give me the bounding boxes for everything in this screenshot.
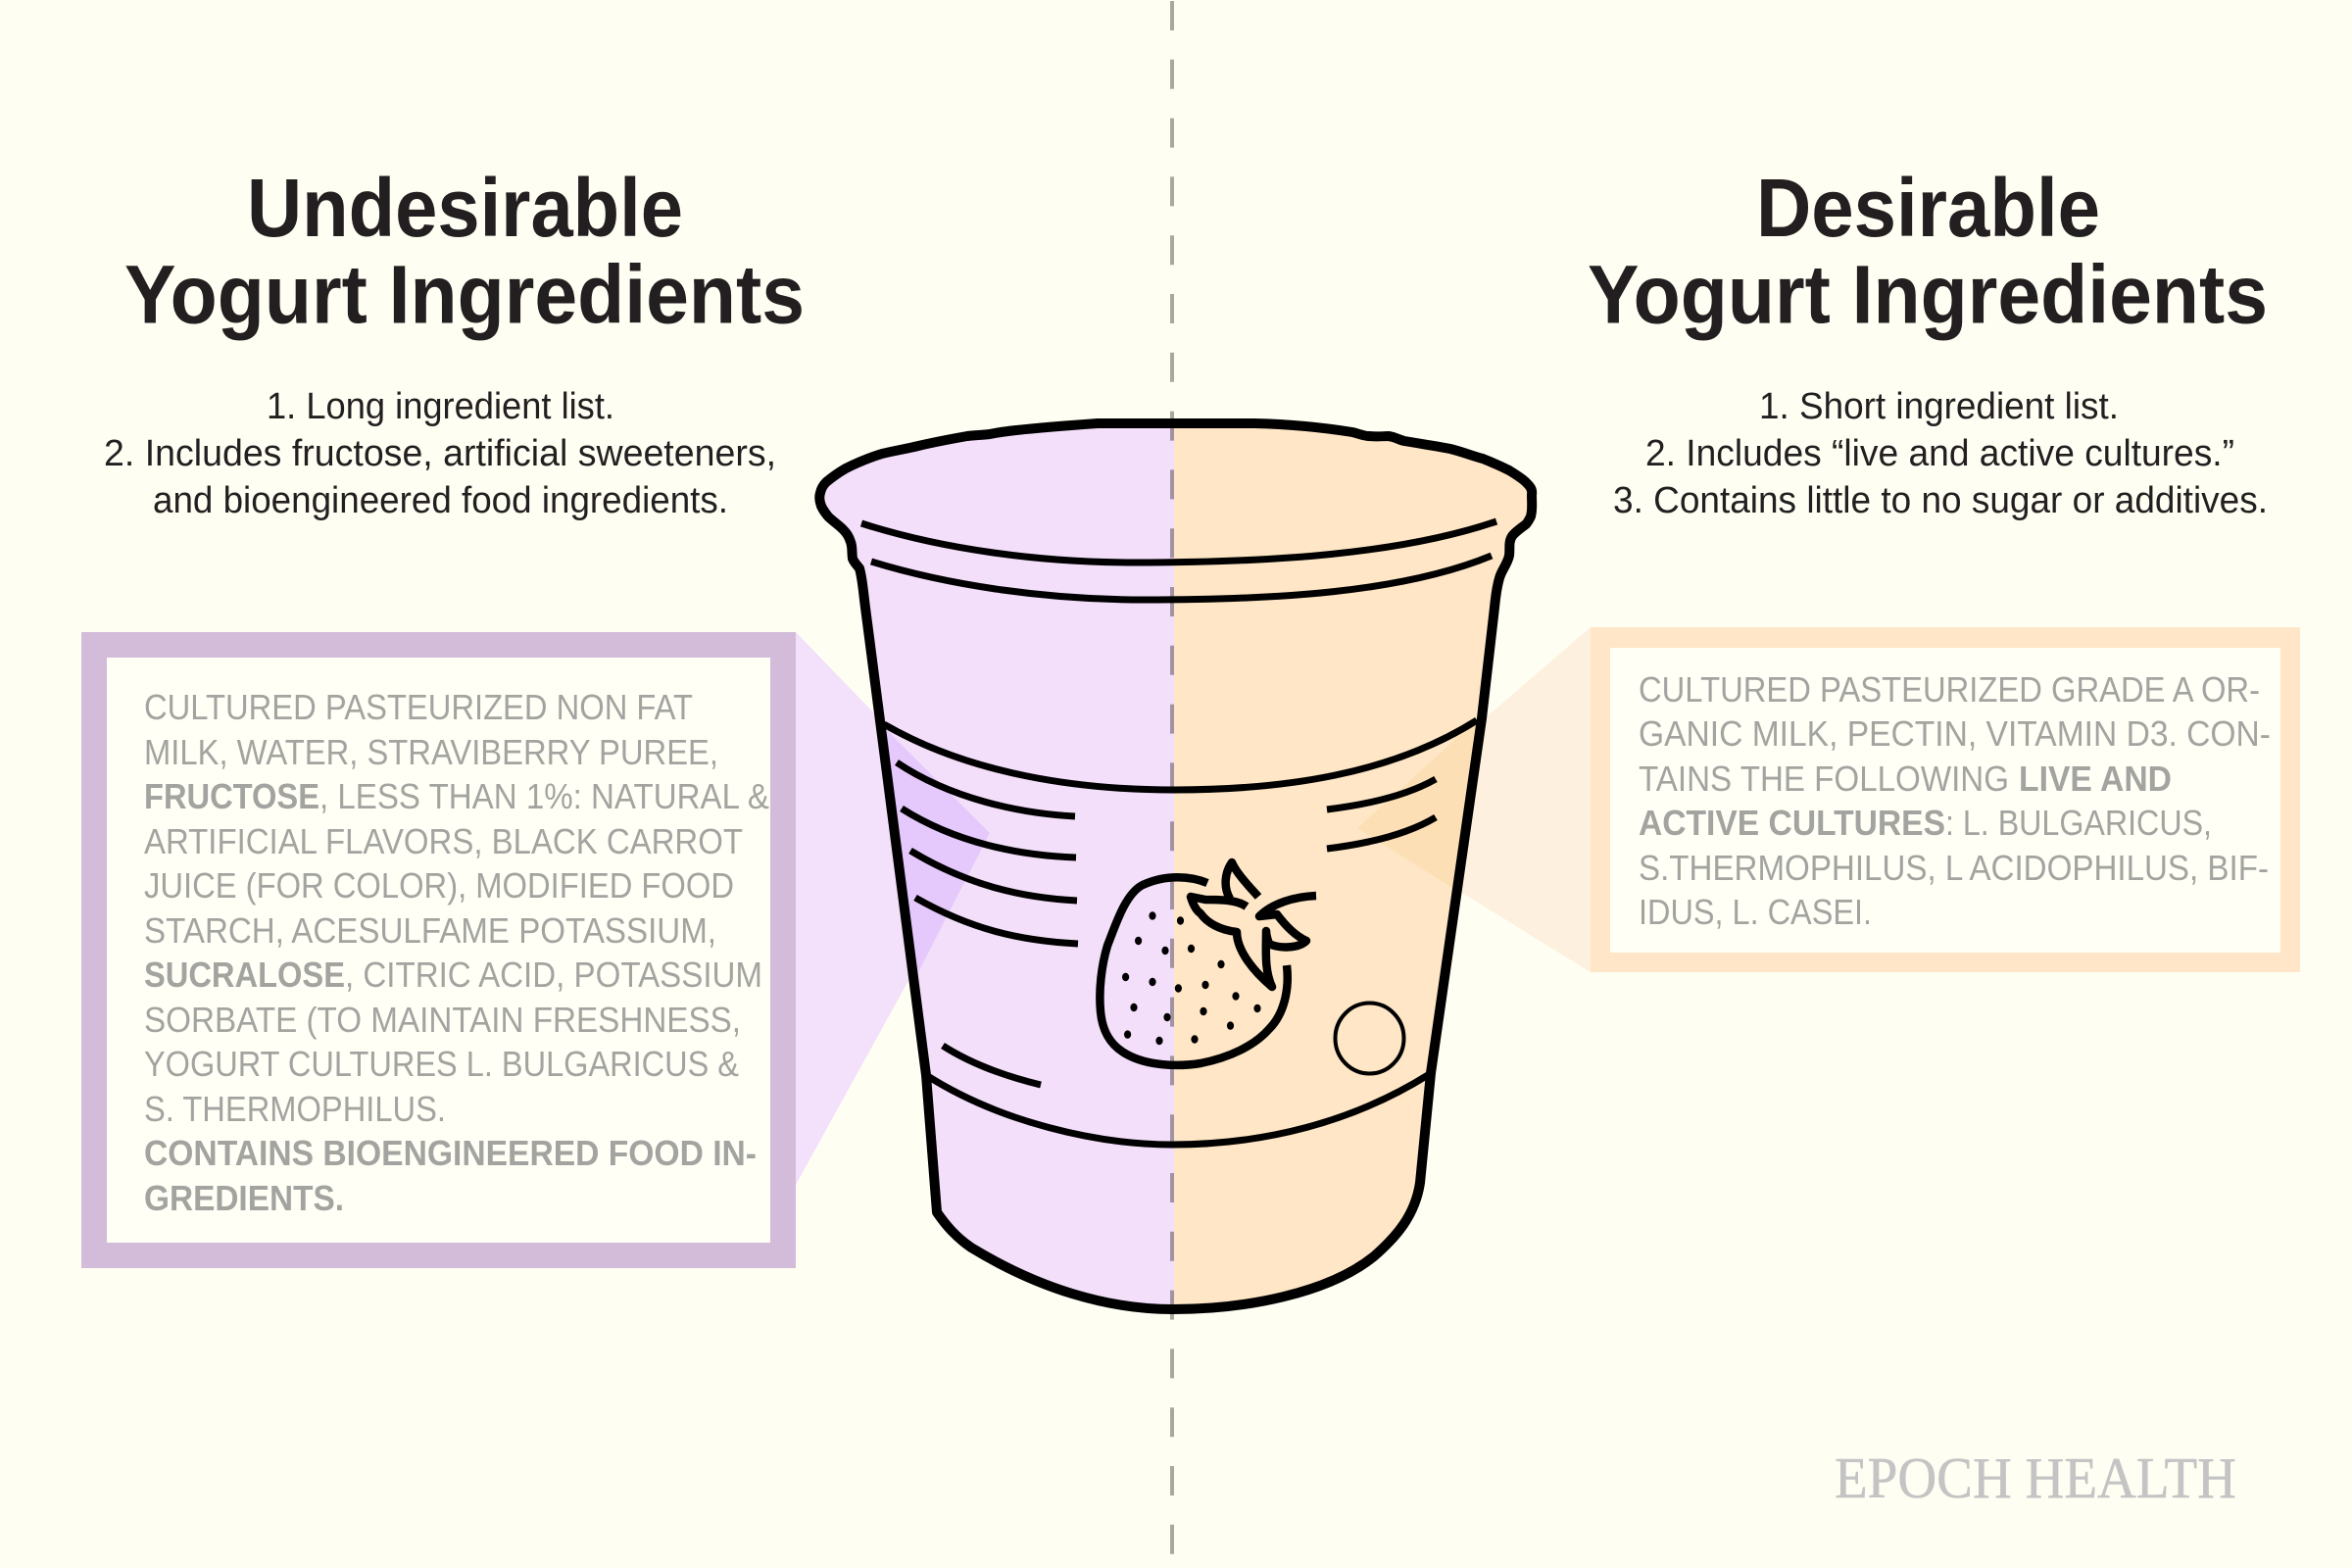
ingredient text: desirable: IDUS, L. CASEI. [1639,892,1872,932]
heading: undesirable: Undesirable [247,162,683,254]
heading: desirable [1588,162,2268,341]
ingredient text: undesirable: SORBATE (TO MAINTAIN FRESHNESS, [144,1000,741,1040]
ingredient text: desirable: GANIC MILK, PECTIN, VITAMIN D3. CON- [1639,713,2271,754]
logo: Epoch Health: EPOCH HEALTH [1835,1446,2236,1510]
rim lines [861,521,1496,600]
text block: desirable criteria [1613,386,2268,521]
label band [884,720,1477,1145]
ingredient text: undesirable: , CITRIC ACID, POTASSIUM [345,955,762,995]
text block: undesirable criteria: 2. Includes fructose, artificial sweeteners, [104,433,776,474]
ingredient text: undesirable: GREDIENTS. [144,1178,344,1218]
text block: undesirable criteria: and bioengineered food ingredients. [153,480,728,521]
cup outline [819,423,1532,1309]
strawberry seeds [1122,911,1261,1045]
ingredient text: undesirable: FRUCTOSE [144,776,319,816]
heading: undesirable [124,162,805,341]
cup fill: two-tone [804,412,1546,1323]
ingredient text: undesirable: SUCRALOSE [144,955,345,995]
icon: strawberry [1100,862,1316,1065]
icon: yogurt cup [804,412,1546,1323]
ingredient text: undesirable: STARCH, ACESULFAME POTASSIUM, [144,910,716,951]
heading: undesirable: Yogurt Ingredients [124,249,805,341]
text block: desirable criteria: 2. Includes “live and active cultures.” [1645,433,2234,474]
text block: desirable criteria: 1. Short ingredient list. [1759,386,2119,427]
heading: desirable: Desirable [1756,162,2100,254]
ingredient text: undesirable: JUICE (FOR COLOR), MODIFIED FOOD [144,865,734,906]
ingredient text: desirable: CULTURED PASTEURIZED GRADE A OR- [1639,669,2260,710]
ingredient text: undesirable: CONTAINS BIOENGINEERED FOOD IN- [144,1133,757,1173]
panel: undesirable ingredient label [81,632,796,1268]
ingredient text: desirable: LIVE AND [2019,759,2172,799]
ingredient text: desirable: TAINS THE FOLLOWING [1639,759,2009,799]
ingredient text: desirable: S.THERMOPHILUS, L ACIDOPHILUS, BIF- [1639,848,2269,888]
ingredient text: desirable: : L. BULGARICUS, [1945,803,2212,843]
ingredient text: undesirable: S. THERMOPHILUS. [144,1089,446,1129]
text block: desirable criteria: 3. Contains little to no sugar or additives. [1613,480,2268,521]
label text lines [897,762,1436,1085]
label circle [1335,1004,1403,1074]
ingredient text: undesirable: CULTURED PASTEURIZED NON FAT [144,687,693,727]
callout wedge: desirable [1357,627,1591,972]
ingredient text: undesirable [144,687,769,1218]
ingredient text: desirable: ACTIVE CULTURES [1639,803,1945,843]
text block: undesirable criteria [104,386,776,521]
text block: undesirable criteria: 1. Long ingredient list. [267,386,614,427]
ingredient text: undesirable: ARTIFICIAL FLAVORS, BLACK CARROT [144,821,743,861]
ingredient text: undesirable: MILK, WATER, STRAVIBERRY PUREE, [144,732,718,772]
callout wedge: undesirable [796,632,990,1185]
ingredient text: undesirable: YOGURT CULTURES L. BULGARICUS & [144,1044,739,1084]
ingredient text: desirable [1639,669,2271,932]
ingredient text: undesirable: , LESS THAN 1%: NATURAL & [319,776,769,816]
center dashed divider [1170,1,1174,1568]
panel: desirable ingredient label [1591,627,2300,972]
heading: desirable: Yogurt Ingredients [1588,249,2268,341]
